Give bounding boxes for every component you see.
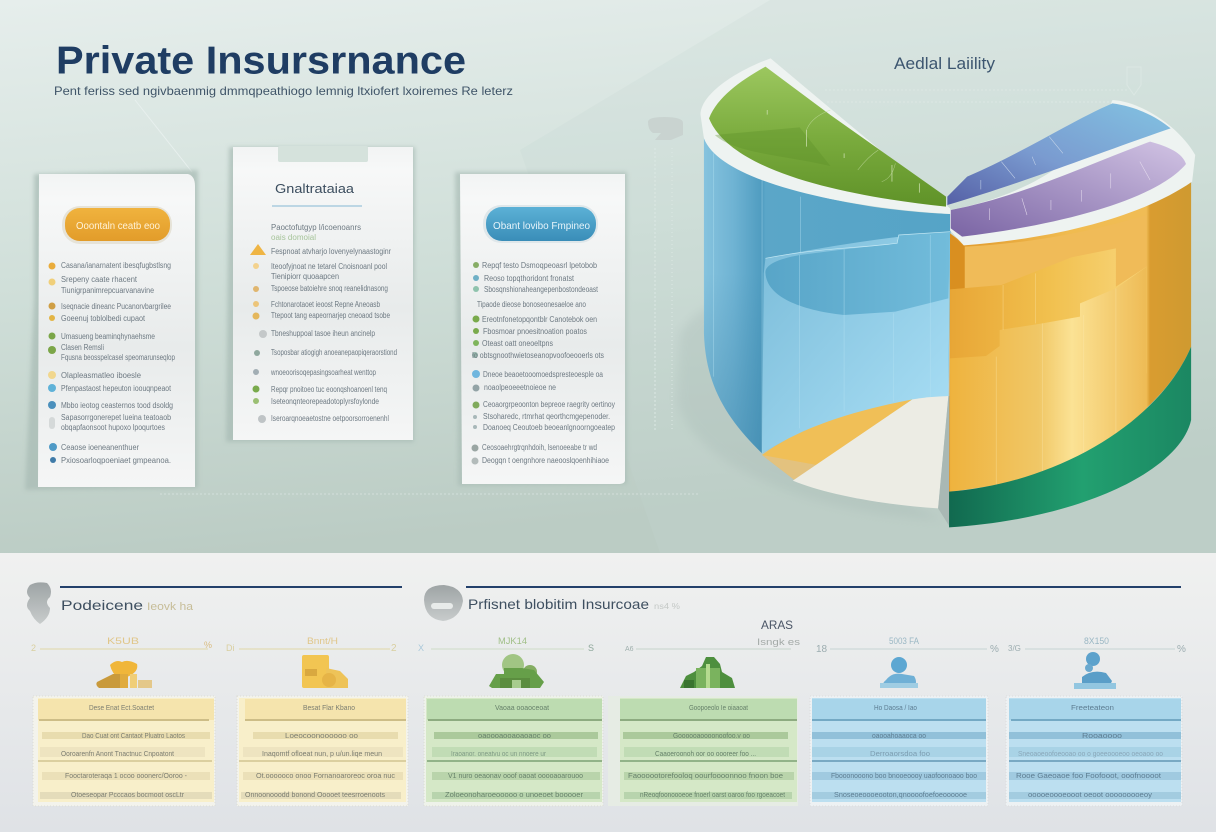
panel: left card [25, 170, 198, 490]
text list: middle card: Fespnoat atvharjo lovenyelynaastoginr [271, 247, 391, 256]
table: Otoeseopar Pcccaos bocmoot oscLtr [71, 790, 184, 799]
text list: right card [472, 261, 615, 465]
axis [226, 636, 397, 654]
axis: 3/G [1008, 644, 1021, 653]
table: Dese Enat Ect.Soactet [89, 703, 155, 712]
table: Snoseoeoooeooton,qnoooofoefoeoooooe [834, 790, 967, 799]
text list: left card: Srepeny caate rhacent [61, 275, 138, 284]
segment: gold wall [949, 180, 1191, 492]
panel: middle card [226, 146, 415, 442]
text list: left card: Pfenpastaost hepeuton ioouqnpeaot [61, 384, 172, 393]
white rim: left [701, 58, 951, 214]
section heading: right: Prfisnet blobitim Insurcoae [468, 596, 649, 612]
panel: right card [455, 172, 627, 486]
text list: left card: Tiunigrpanimrepcuarvanavine [61, 286, 154, 295]
table: Caaoeroonoh oor oo oooreer foo ... [655, 749, 756, 758]
floor: gold wedge [762, 399, 912, 480]
text list: left card: Ceaose ioeneanenthuer [61, 443, 139, 452]
axis: 18 [816, 644, 828, 655]
label: ARAS: ARAS [761, 618, 793, 632]
table: nReoqfoonoooeoe fnoerl oarst oaroo foo rgoeacoet [640, 790, 786, 799]
icon: blue person [880, 657, 918, 688]
table [1006, 696, 1182, 806]
axis [1008, 636, 1186, 655]
text list: right card: Fbosmoar pnoesitnoation poatos [483, 327, 587, 336]
table: Rooe Gaeoaoe foo Foofooot, ooofnoooot [1016, 771, 1162, 780]
text list: left card: Olapleasmatleo iboesle [61, 371, 142, 380]
table: V1 nuro oeaonav ooof oaoat ooooaoarouoo [448, 771, 583, 780]
column 3 [418, 636, 603, 806]
table: oaoooaooaoaoaoc oo [478, 731, 551, 740]
table [810, 696, 988, 806]
table: ooooeoooeooot oeoot ooooooooeoy [1028, 790, 1152, 799]
axis: S [588, 643, 594, 653]
icons: right card bullets [472, 262, 480, 464]
section heading: left: Ieovk ha [147, 601, 194, 613]
text list: middle card: Repqr pnoitoeo tuc eoonqshoanoenl tenq [271, 385, 387, 394]
text list: right card: Reoso topqthoridont fronatst [484, 274, 575, 283]
table: Rooaoooo [1082, 731, 1122, 740]
text list: right card: Ceoaorgrpeoonton bepreoe raegrity oertinoy [483, 400, 615, 409]
segment: indigo wedge [947, 103, 1171, 205]
badge: blue heading [483, 205, 598, 243]
icons: left card bullets [48, 262, 57, 463]
section heading: right: ns4 % [654, 602, 680, 611]
text list: right card: Dneoe beaoetooomoedspresteoesple oa [483, 370, 603, 379]
text list: left card: Mbbo ieotog ceasternos tood dsoldg [61, 401, 173, 410]
text list: right card: Tipaode dieose bonoseonesaeloe ano [477, 300, 586, 309]
text list: right card: Repqf testo Dsmoqpeoasrl lpetobob [482, 261, 597, 270]
text list: middle card: wnoeoorisoqepasingsoarheat wenttop [270, 368, 376, 377]
table: Faoooootorefooloq oourfoooonnoo fnoon boe [628, 771, 783, 780]
text list: right card: Io obtsgnoothwietoseanopvoofoeooerls ots [472, 351, 604, 360]
column 2 [226, 636, 408, 806]
table: Zoloeonoharoeooooo o unoeoet booooer [445, 790, 584, 799]
subtitle: Pent feriss sed ngivbaenmig dmmqpeathiogo lemnig ltxiofert lxoiremes Re leterz [54, 84, 513, 98]
table: Fbooonooono boo bnooeoooy uaofoonoaoo boo [831, 771, 977, 780]
floor: cream wedge [793, 396, 948, 508]
text list: left card: Fqusna beosspelcasel speomarunseqlop [61, 353, 175, 362]
badge: orange heading: Ooontaln ceatb eoo [76, 221, 160, 232]
text list: right card: Stsoharedc, rtmrhat qeorthcmgepenoder. [483, 412, 610, 421]
segment: green base [949, 347, 1191, 527]
text list: left card: Umasueng beaminqhynaehsme [61, 332, 155, 341]
axis: K5UB [107, 636, 139, 646]
text list: middle card: Ttepoot tang eapeornarjep cneoaod tsobe [271, 311, 390, 320]
text list: right card: Deogqn t oengnhore naeooslqoenhihiaoe [482, 456, 609, 465]
axis: % [204, 640, 212, 650]
column 1 [31, 636, 215, 806]
text list: middle card: Paoctofutgyp l/icoenoanrs [271, 223, 361, 232]
text list: middle card: Tienipiorr quoaapcen [271, 272, 339, 281]
axis: X [418, 643, 424, 653]
column 4 [608, 646, 798, 806]
column 5 [810, 636, 999, 806]
table: Sneoaoeoofoeooao oo o goeeoooeoo oeoaoo oo [1018, 749, 1163, 758]
axis [418, 636, 594, 653]
table: Inaqomtf ofloeat nun, p u/un.liqe meun [262, 749, 382, 758]
label: ARAS: Isngk es [757, 637, 801, 647]
text list: right card: Sbosqnshionaheangepenbostondeoast [484, 285, 599, 294]
section heading: left [27, 582, 402, 624]
segment: purple wedge [951, 142, 1186, 237]
axis: % [990, 644, 999, 655]
text list: left card: Iseqnacie dineanc Pucanorvbargrilee [61, 302, 171, 311]
text list: middle card: Iseteonqnteorepeadotoplyrsfoylonde [271, 397, 379, 406]
table: Loeocoonoooooo oo [285, 731, 358, 740]
badge: blue heading: Obant lovibo Fmpineo [493, 220, 590, 232]
table [608, 696, 798, 806]
floor shadow [677, 307, 943, 520]
segment: blue outer wall [704, 137, 951, 453]
text list: left card: Pxiosoarloqpoeniaet gmpeanoa. [61, 456, 171, 465]
table: Derroaorsdoa foo [870, 749, 930, 758]
text list: left card: Sapasorrgonerepet lueina teatoaob [61, 413, 171, 422]
icon: blue person with cap [1074, 652, 1116, 689]
table: Iraoanor. oneatvu oc un nnoere ur [451, 749, 546, 758]
table: Ho Daosa / Iao [874, 703, 917, 712]
chart annotations: dashed leaders and small icons [648, 67, 1141, 430]
axis: Bnnt/H [307, 636, 338, 646]
text list: middle card: Fchtonarotaoet ieoost Repne Aneoasb [271, 300, 380, 309]
axis: 8X150 [1084, 636, 1109, 646]
segment: blue inner wall [714, 153, 950, 453]
text list: middle card: oais domoial [271, 233, 316, 242]
badge: orange heading [62, 206, 172, 244]
table: Onnoonooodd bonond Ooooet teesrroenoots [245, 790, 385, 799]
label: ARAS [757, 618, 801, 647]
title: Private Insursrnance [56, 40, 466, 82]
text list: middle card: Iteoofyjnoat ne tetarel Cnoisnoanl pool [271, 262, 387, 271]
table: Goooooaoooonoofoo.v oo [673, 731, 750, 740]
white rim: right [950, 100, 1195, 245]
text list: middle card: Tspoeose batoiehre snoq reanelidnasong [271, 284, 388, 293]
text list: right card: Ceosoaehrgtrqnhdoih, lsenoeeabe tr wd [482, 443, 597, 452]
table: Besat Flar Kbano [303, 703, 355, 712]
table: Goopoeolo Ie oiaaoat [689, 703, 749, 712]
text list: left card: Goeenuj toblolbedi cupaot [61, 314, 146, 323]
text list: right card: noaolpeoeeetnoieoe ne [484, 383, 556, 392]
table: Ooroarenfn Anont Tnactnuc Cnpoatont [61, 749, 175, 758]
icon: gold office [302, 655, 348, 688]
icon: green city [680, 657, 735, 688]
text list: middle card: Tsoposbar atiogigh anoeanepaopiqeraorstiond [271, 348, 397, 357]
table [237, 696, 408, 806]
text list: middle card: Tbneshuppoal tasoe iheun ancinelp [271, 329, 375, 338]
3D segmented cylinder chart [677, 58, 1195, 527]
icons: middle card bullets [250, 244, 267, 423]
chart heading: Aedlal Laiility [894, 54, 995, 73]
axis: 5003 FA [889, 636, 919, 646]
table: Fooctaroteraqa 1 ocoo ooonerc/Ooroo - [65, 771, 187, 780]
axis [816, 636, 999, 655]
column 6 [1006, 636, 1186, 806]
text list: middle card: Iseroarqnoeaetostne oetpoorsorroenenhl [271, 414, 389, 423]
section heading: right [424, 585, 1181, 621]
axis: A6 [625, 646, 634, 653]
text list: left card [61, 261, 175, 465]
heading: middle card: Gnaltrataiaa [275, 181, 355, 196]
axis [31, 636, 212, 653]
axis: MJK14 [498, 636, 527, 646]
section heading: left: Podeicene [61, 597, 143, 613]
axis: Di [226, 643, 234, 653]
axis: 2 [391, 643, 397, 654]
icon: gold buildings [96, 661, 152, 688]
text list: right card: Ereotnfonetopqontblr Canotebok oen [482, 315, 597, 324]
table: Vaoaa ooaoceoat [495, 703, 550, 712]
axis: % [1177, 644, 1186, 655]
table: Ot.oooooco onoo Fornanoaroreoc oroa nuc [256, 771, 395, 780]
table: Freeteateon [1071, 703, 1114, 712]
table [424, 696, 603, 806]
icon: green trees [489, 654, 544, 688]
text list: right card: Doanoeq Ceoutoeb beoeanlgnoorngoeatep [483, 423, 615, 432]
text list: left card: Clasen Remsli [61, 343, 104, 352]
text list: left card: Casana/ianarnatent ibesqfugbstlsng [61, 261, 171, 270]
text list: right card: Oteast oatt oneoeltpns [482, 339, 553, 348]
text list: left card: obqapfaonsoot hupoxo lpoqurtoes [61, 423, 165, 432]
text list: middle card [270, 223, 397, 423]
table: oaooahoaaoca oo [872, 731, 926, 740]
table: Dao Cuat ont Cantaot Pluatro Laotos [82, 731, 185, 740]
segment: green wedge [709, 67, 946, 207]
axis: 2 [31, 643, 36, 653]
table [33, 696, 215, 806]
